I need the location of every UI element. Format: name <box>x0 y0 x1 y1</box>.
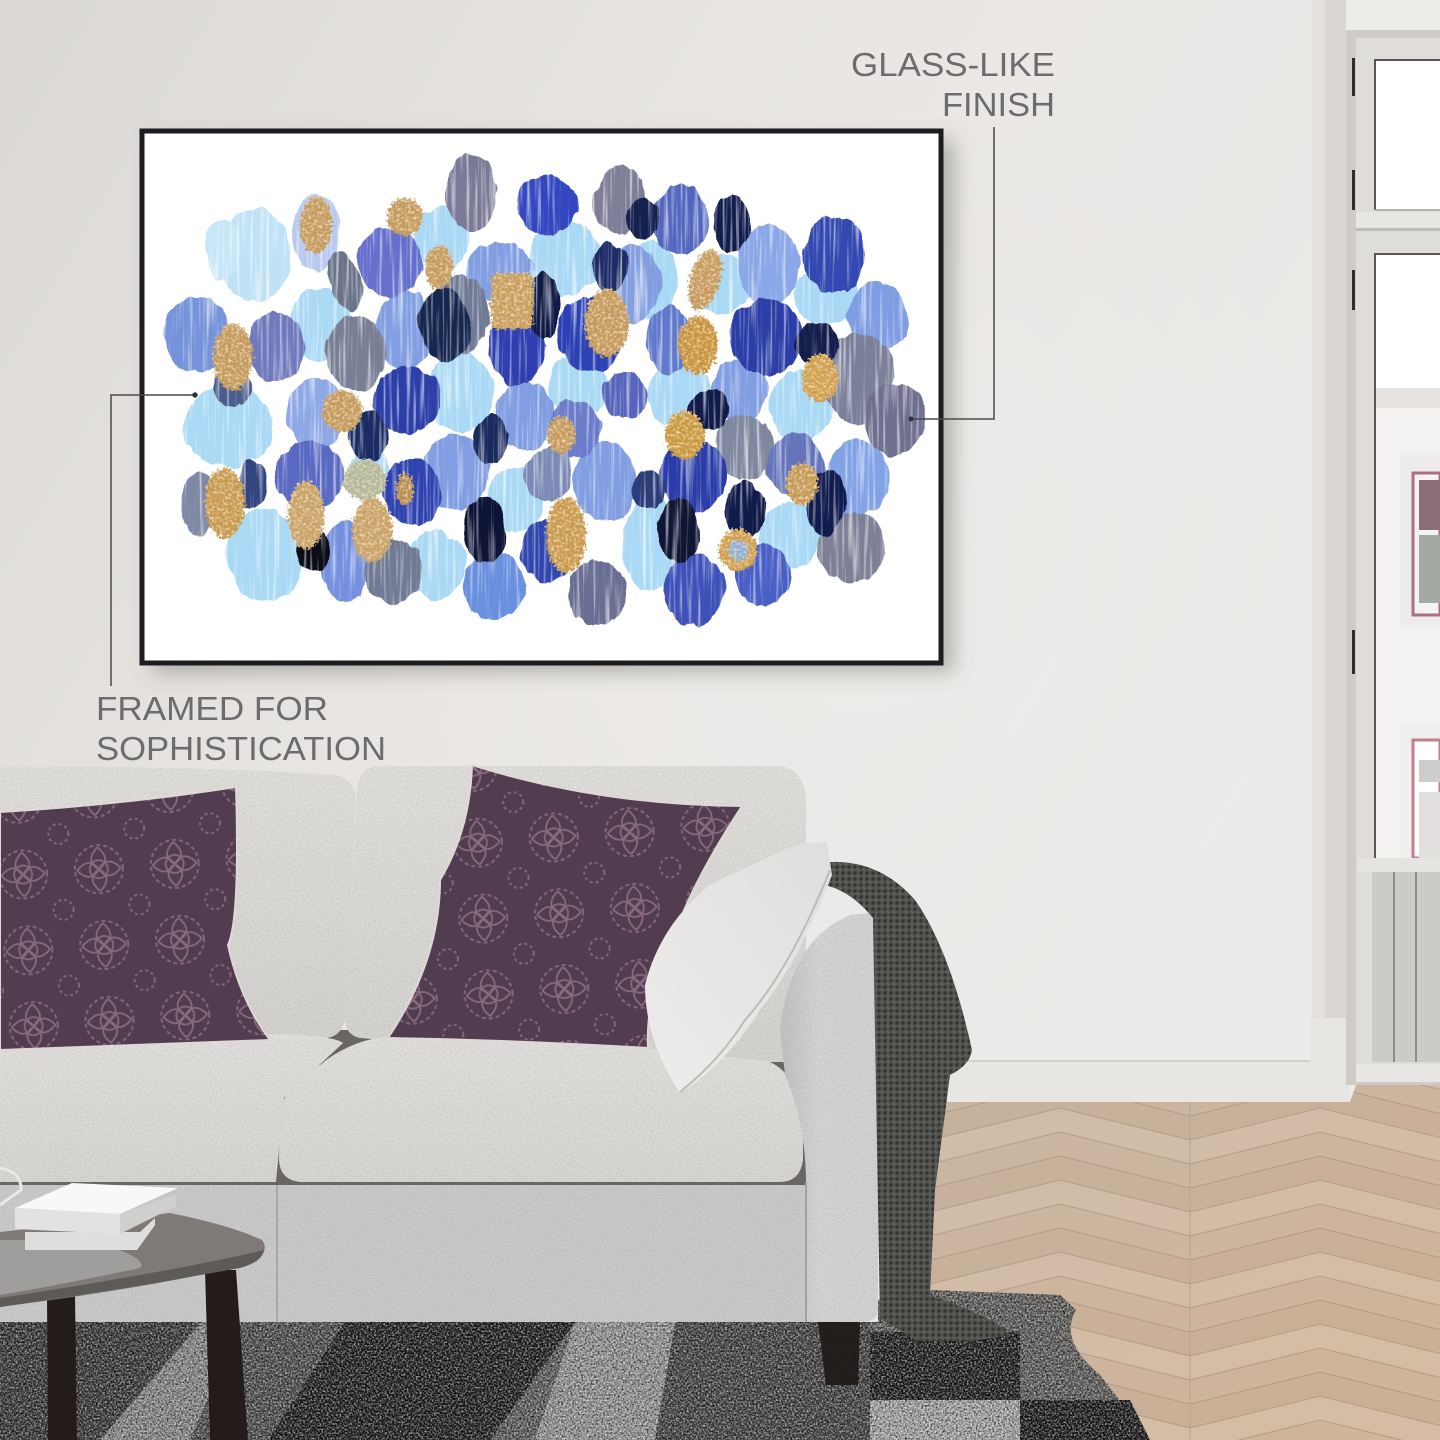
leader line: glass-like finish <box>908 127 994 422</box>
seat cushion centre <box>279 1036 803 1182</box>
sofa base <box>0 1185 806 1322</box>
label: framed for sophistication: SOPHISTICATION <box>96 730 386 767</box>
label: glass-like finish <box>851 46 1055 123</box>
pillow: centre purple <box>388 765 742 1048</box>
painting strokes <box>164 152 927 626</box>
books <box>25 1218 155 1250</box>
wall light glow <box>300 100 1320 1100</box>
coffee table <box>0 1168 265 1440</box>
sofa arm <box>780 912 878 1322</box>
upper glass <box>1375 60 1440 210</box>
glass mug <box>0 1168 21 1205</box>
floor: herringbone parquet <box>900 1085 1440 1440</box>
violet-blue strokes <box>247 186 825 626</box>
lower glass with outside building <box>1375 254 1440 858</box>
grey strokes <box>182 152 927 626</box>
navy strokes <box>214 196 846 571</box>
lower wood panel <box>1358 858 1440 872</box>
throw blanket <box>824 862 1010 1342</box>
gold leaf patches <box>205 197 838 573</box>
window and door frame <box>1310 0 1440 1102</box>
frame divider <box>1356 212 1440 228</box>
deep blue strokes <box>374 175 866 582</box>
sofa leg <box>818 1322 860 1385</box>
hinges <box>1352 58 1355 96</box>
wall background <box>0 0 1440 1102</box>
light blue strokes <box>183 206 858 601</box>
crevice shadows <box>0 1030 806 1186</box>
frame shadow <box>152 140 954 672</box>
label: framed for sophistication: FRAMED FOR <box>96 690 328 727</box>
pillow: white <box>645 842 832 1093</box>
door casing <box>1312 0 1346 1102</box>
rug light segments <box>100 1322 240 1440</box>
periwinkle strokes <box>164 194 908 620</box>
framed artwork <box>142 131 954 672</box>
back cushion right <box>345 766 806 1062</box>
black frame <box>142 131 941 663</box>
sofa <box>0 766 878 1385</box>
pillow: left purple <box>0 787 270 1050</box>
back cushion left <box>0 767 356 1038</box>
label: glass-like finish: GLASS-LIKE <box>851 46 1055 83</box>
table legs <box>47 1295 77 1440</box>
leader line: framed for sophistication <box>111 392 198 686</box>
marble top <box>0 1213 265 1307</box>
baseboard <box>950 1060 1312 1102</box>
label: glass-like finish: FINISH <box>942 86 1055 123</box>
rug <box>0 1290 1150 1440</box>
seat cushion left <box>0 1034 343 1182</box>
rug dark segments <box>0 1322 200 1440</box>
label: framed for sophistication <box>96 690 386 767</box>
